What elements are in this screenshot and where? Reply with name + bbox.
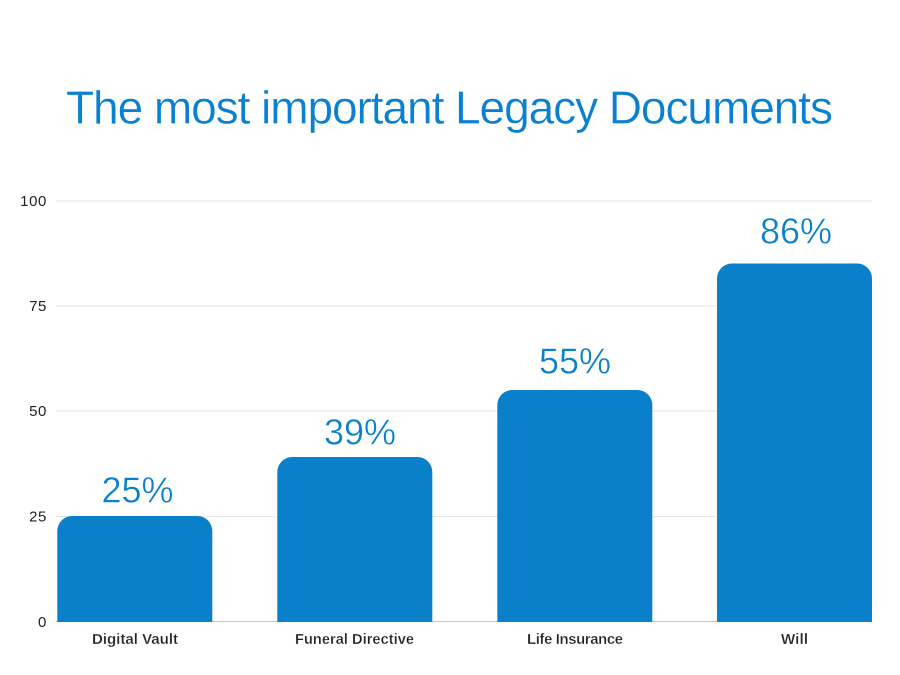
- bar chart: [20, 193, 872, 648]
- bar: Digital Vault: [57, 516, 212, 622]
- y axis labels: 100: [20, 193, 47, 210]
- value labels: 39%: [324, 412, 396, 452]
- category labels: Life Insurance: [527, 632, 623, 648]
- category labels: Will: [781, 631, 808, 648]
- y axis labels: 25: [29, 508, 47, 526]
- category labels: [92, 631, 808, 648]
- y axis labels: [20, 193, 47, 631]
- y axis labels: 0: [38, 614, 47, 631]
- value labels: 55%: [539, 340, 611, 382]
- bar: Life Insurance: [497, 390, 652, 622]
- value labels: [101, 210, 832, 510]
- y axis labels: 50: [29, 403, 47, 420]
- value labels: 86%: [760, 210, 832, 252]
- category labels: Funeral Directive: [295, 632, 414, 648]
- value labels: 25%: [101, 470, 174, 510]
- bar: Will: [717, 264, 872, 622]
- bar: Funeral Directive: [277, 457, 432, 622]
- category labels: Digital Vault: [92, 631, 178, 648]
- y axis labels: 75: [29, 298, 47, 315]
- title: The most important Legacy Documents: [66, 82, 833, 134]
